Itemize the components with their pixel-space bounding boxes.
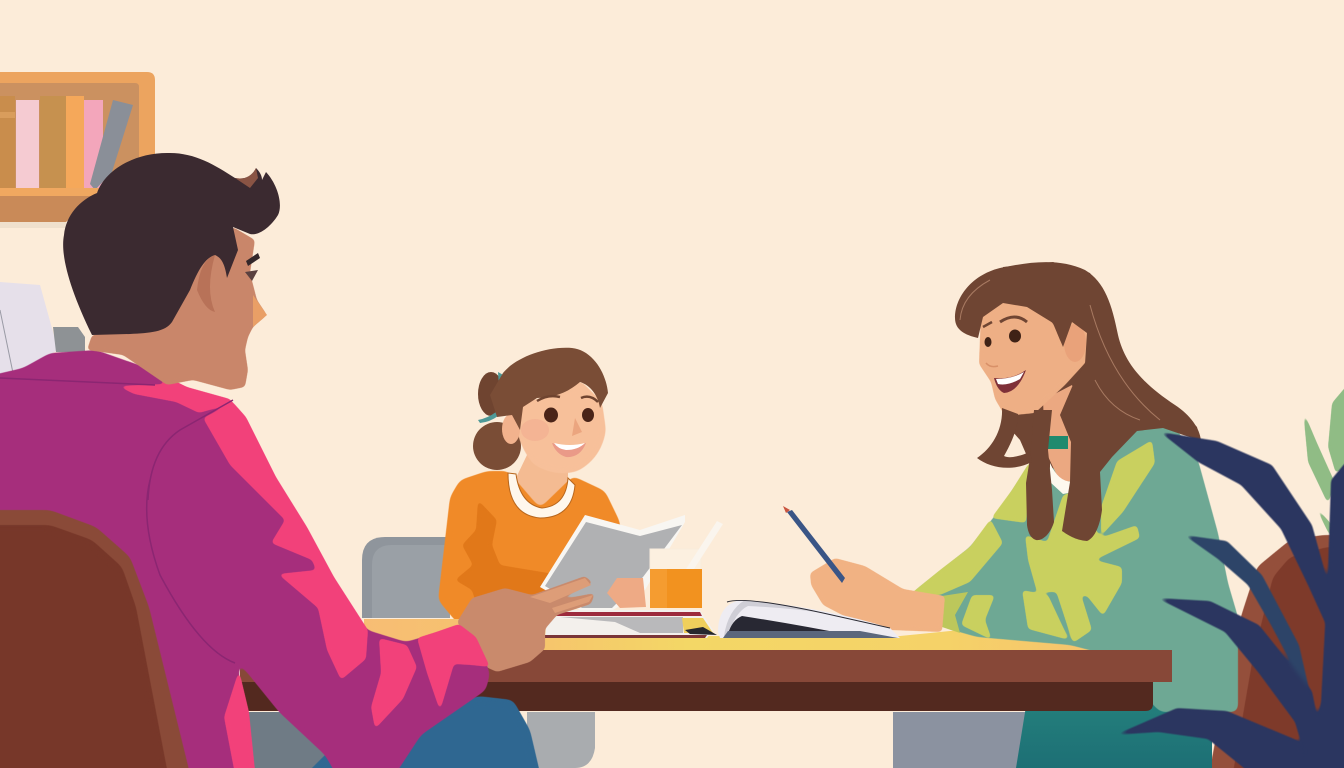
- table top: [364, 619, 1172, 651]
- man sweater pink highlights: [118, 371, 490, 768]
- woman hand: [810, 558, 945, 632]
- open book: [718, 600, 900, 638]
- paper behind man: [0, 282, 58, 375]
- woman sweater: [908, 420, 1238, 712]
- glass of juice: [650, 521, 723, 608]
- woman sweater yellow patches: [908, 440, 1155, 643]
- woman ear: [1064, 324, 1086, 362]
- left closed book: [545, 610, 717, 638]
- man hair highlight: [235, 168, 258, 188]
- man hair: [63, 153, 280, 335]
- gray chair of girl: [362, 537, 595, 768]
- girl: [438, 348, 624, 624]
- girl ear: [502, 414, 520, 444]
- man hand: [457, 576, 595, 672]
- girl sweater: [438, 471, 624, 624]
- table front: [240, 650, 1172, 711]
- girl hair bun: [478, 372, 504, 416]
- girl sweater shadow: [455, 500, 560, 610]
- man sweater: [0, 350, 490, 768]
- girl facial features: [521, 396, 598, 457]
- bookshelf: [0, 72, 155, 228]
- woman front hair: [955, 262, 1201, 541]
- man fingers: [530, 578, 593, 613]
- girl hand: [607, 578, 646, 608]
- gray chair of woman: [893, 712, 1030, 768]
- document held by girl: [540, 515, 685, 610]
- woman hair wisp: [977, 408, 1032, 468]
- man nose: [253, 295, 267, 327]
- woman facial features: [983, 317, 1027, 393]
- left brown chair: [0, 510, 194, 768]
- woman cuff: [942, 592, 968, 633]
- girl neck: [515, 455, 575, 508]
- man neck and face: [87, 227, 267, 390]
- man eye and brow: [245, 253, 260, 281]
- woman neck: [1043, 385, 1090, 482]
- girl hair: [490, 348, 608, 430]
- gray object behind man: [53, 327, 85, 352]
- man sweater fold lines: [0, 378, 235, 663]
- man: [0, 153, 595, 768]
- girl hair ties: [478, 372, 505, 423]
- woman hair lines: [960, 280, 1160, 420]
- woman left hair strand: [1026, 410, 1054, 540]
- girl collar: [508, 473, 575, 518]
- woman collar: [1048, 436, 1068, 449]
- plant green leaves: [1303, 370, 1344, 540]
- woman face: [979, 301, 1090, 416]
- girl face: [517, 380, 606, 473]
- plant dark leaves: [1115, 432, 1344, 768]
- woman: [810, 262, 1238, 768]
- woman trousers: [1016, 700, 1212, 768]
- woman back hair: [1000, 262, 1200, 480]
- right brown chair: [1206, 535, 1344, 768]
- man ear: [197, 255, 215, 312]
- pencil: [783, 506, 845, 583]
- man jeans: [290, 696, 544, 768]
- lower gray chair behind man: [245, 712, 355, 768]
